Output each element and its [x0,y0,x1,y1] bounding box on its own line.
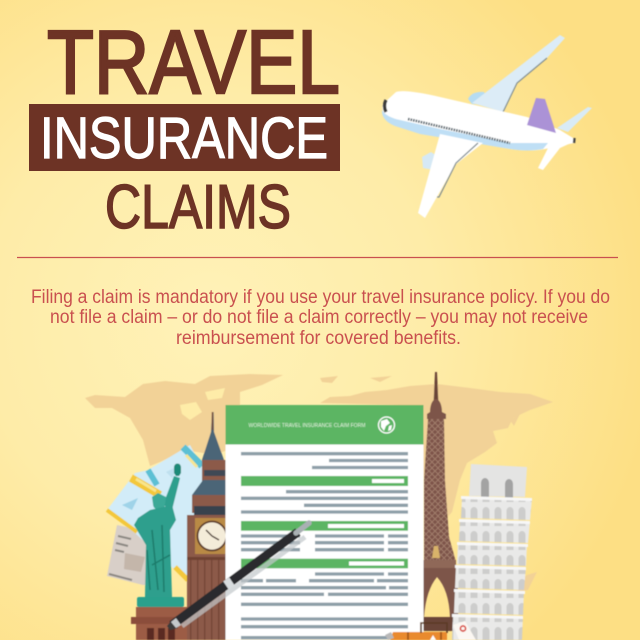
map lakes [180,388,225,420]
Statue of Liberty [134,464,184,607]
pen [167,523,309,630]
title: Travel Insurance Claims [29,13,340,242]
claim form [226,405,424,640]
Eiffel Tower [423,372,459,631]
icon: airplane [382,35,592,218]
luggage tag [453,621,476,640]
intro paragraph: not file a claim – or do not file a claim correctly – you may not receive [50,307,588,328]
title banner: INSURANCE: INSURANCE [40,106,328,171]
illustration: landmarks and claim form [85,372,553,640]
tickets [107,445,202,582]
title word: CLAIMS: CLAIMS [105,173,291,242]
title word: TRAVEL: TRAVEL [47,13,340,113]
suitcase [385,623,447,640]
Big Ben [187,412,232,640]
intro paragraph: reimbursement for covered benefits. [176,328,461,349]
form header [226,405,424,444]
Leaning Tower of Pisa [452,464,532,640]
form text lines [241,454,408,638]
divider [17,256,618,258]
form bar highlights [328,479,404,566]
form green section bars [241,476,408,568]
intro paragraph [31,287,610,349]
receipt [107,525,150,585]
world map [85,374,553,592]
form header: WORLDWIDE TRAVEL INSURANCE CLAIM FORM [248,423,366,429]
form sheet [226,405,424,640]
pedestal [131,607,188,640]
